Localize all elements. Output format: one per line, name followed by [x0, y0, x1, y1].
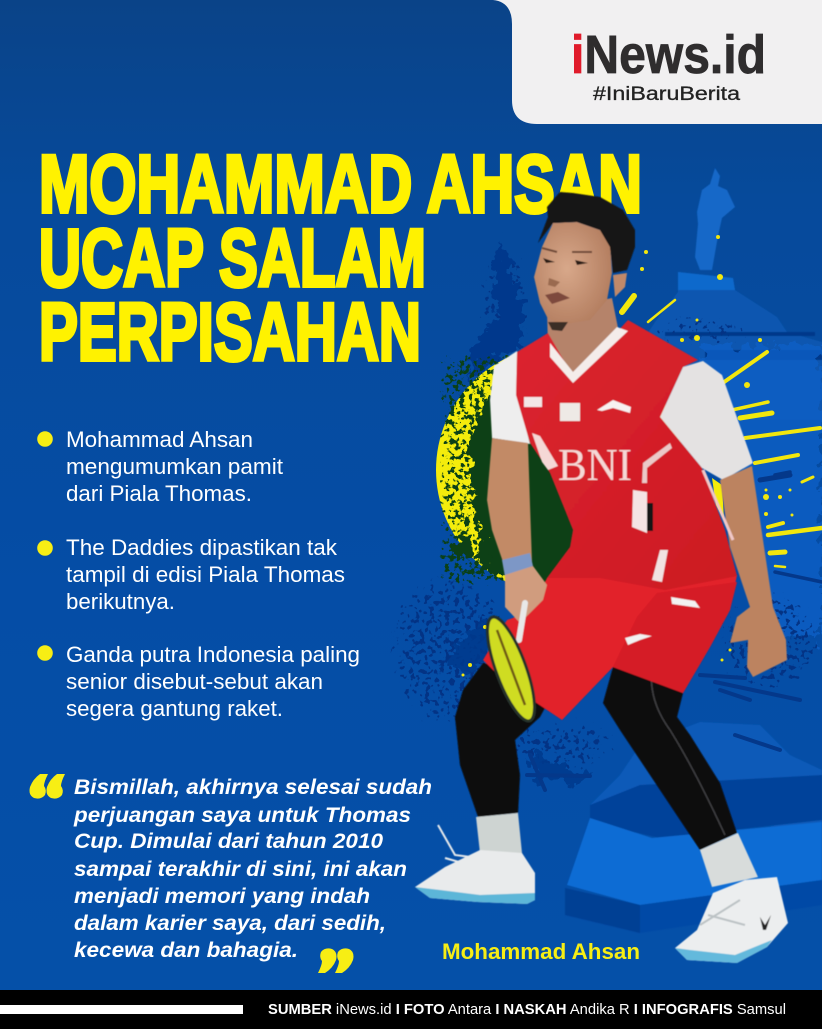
dark green splash inside circle — [453, 350, 640, 620]
nose — [548, 278, 560, 287]
right leg — [603, 664, 737, 850]
quote text: sampai terakhir di sini, ini akan — [74, 858, 407, 881]
closing quote mark — [318, 948, 354, 973]
bullet 1 — [37, 427, 283, 506]
wristband — [502, 553, 533, 577]
bullet 2: tampil di edisi Piala Thomas — [66, 562, 345, 587]
title — [39, 139, 642, 378]
bullet 2: berikutnya. — [66, 589, 175, 614]
opening quote mark — [30, 774, 65, 799]
quote text: dalam karier saya, dari sedih, — [74, 912, 386, 935]
trophy statue — [695, 168, 735, 270]
bullet list — [37, 427, 360, 721]
paint splatter — [380, 230, 822, 790]
circle speckle — [436, 350, 526, 590]
player name: Mohammad Ahsan — [442, 939, 640, 964]
eyes and brows — [542, 248, 592, 252]
head — [534, 192, 635, 331]
neck — [547, 298, 618, 378]
title: PERPISAHAN — [39, 287, 421, 378]
quote text: Cup. Dimulai dari tahun 2010 — [74, 830, 383, 853]
quote text: menjadi memori yang indah — [74, 885, 370, 908]
iNews.id logo: iNews.id — [571, 25, 766, 85]
footer bar — [0, 990, 822, 1029]
trophy cup lower — [590, 722, 822, 830]
hand on racket — [505, 566, 547, 623]
jersey white stripes — [642, 443, 672, 483]
bullet 3: senior disebut-sebut akan — [66, 669, 323, 694]
bullet 3: Ganda putra Indonesia paling — [66, 642, 360, 667]
left arm — [487, 438, 532, 563]
ear — [613, 273, 627, 297]
left sock — [476, 813, 522, 853]
jersey patches — [524, 397, 542, 407]
face — [534, 222, 612, 325]
racket — [478, 603, 544, 726]
yellow paint streaks — [622, 296, 822, 567]
logo panel — [493, 0, 822, 124]
jersey — [516, 320, 737, 590]
navy splash — [445, 240, 590, 785]
right sock — [700, 833, 758, 887]
quote text: kecewa dan bahagia. — [74, 939, 298, 962]
quote text — [73, 776, 432, 962]
bullet 1: Mohammad Ahsan — [66, 427, 253, 452]
bullet 1: mengumumkan pamit — [66, 454, 283, 479]
bullet 2 — [37, 535, 345, 614]
hair — [538, 192, 635, 273]
sponsor BNI: BNI — [558, 439, 632, 490]
title: UCAP SALAM — [39, 213, 426, 304]
jersey collar — [550, 327, 628, 383]
left leg — [455, 663, 560, 817]
mouth — [545, 292, 570, 304]
quote text: perjuangan saya untuk Thomas — [73, 804, 411, 827]
jersey side trim — [703, 470, 733, 540]
right arm — [720, 466, 787, 677]
yellow circle — [436, 346, 684, 594]
lighter blue wash — [640, 345, 822, 640]
beard — [548, 322, 568, 331]
navy speckle — [380, 230, 822, 780]
bullet 2: The Daddies dipastikan tak — [66, 535, 338, 560]
yellow dots — [462, 235, 794, 676]
yellow at jersey edge — [712, 478, 724, 520]
left shoe — [415, 825, 535, 904]
bullet 3: segera gantung raket. — [66, 696, 283, 721]
right shoe — [675, 877, 788, 963]
hashtag: #IniBaruBerita — [593, 84, 741, 105]
bullet 3 — [37, 642, 360, 721]
credits: SUMBER iNews.id I FOTO Antara I NASKAH Andika R I INFOGRAFIS Samsul — [268, 1001, 786, 1018]
shorts — [483, 552, 737, 720]
bullet 1: dari Piala Thomas. — [66, 481, 252, 506]
trophy pedestal — [567, 818, 822, 905]
navy strokes — [527, 472, 822, 790]
right sleeve — [660, 361, 753, 480]
quote text: Bismillah, akhirnya selesai sudah — [74, 776, 432, 799]
player — [415, 192, 788, 963]
trophy illustration — [565, 168, 822, 933]
trophy dome — [640, 272, 822, 420]
left sleeve — [490, 351, 530, 444]
